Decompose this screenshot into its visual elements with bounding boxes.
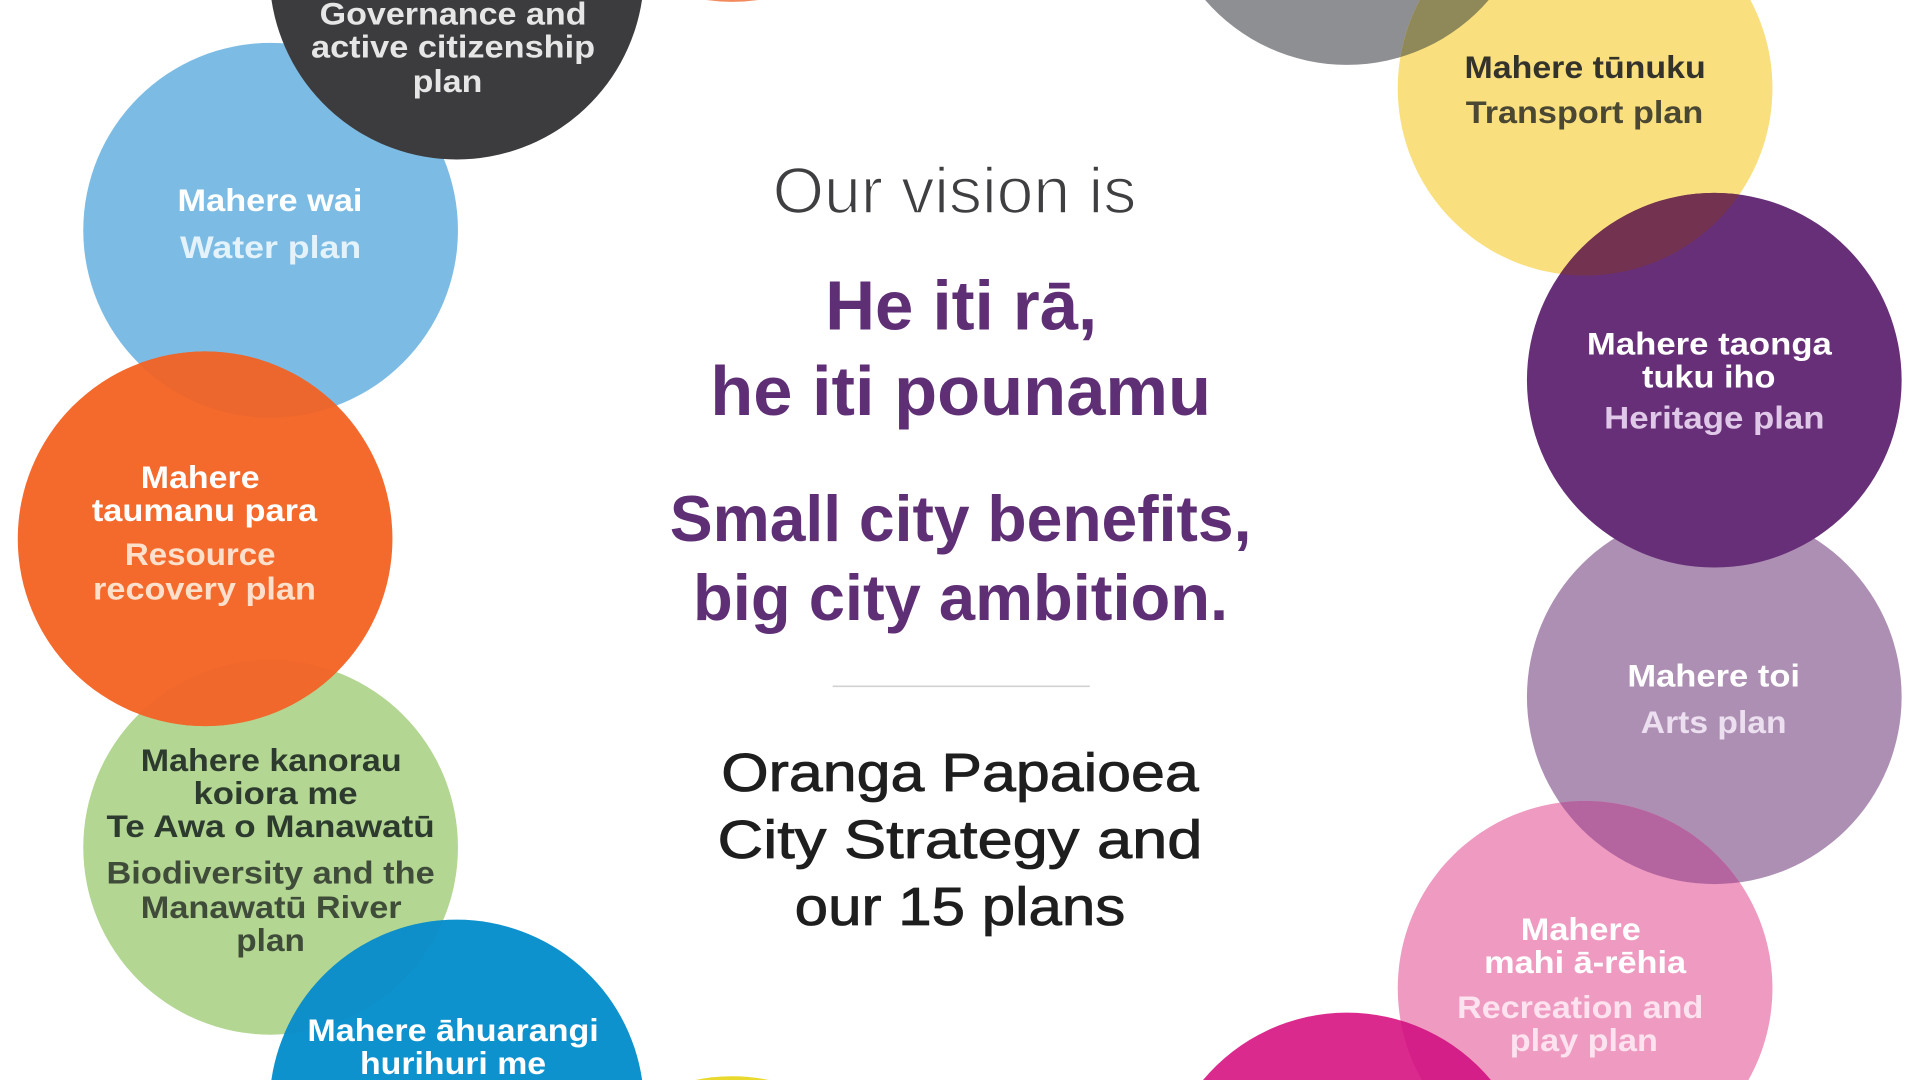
label: governance plan: plan [413, 64, 482, 99]
label: biodiversity plan: Te Awa o Manawatū [107, 809, 435, 844]
text block: Oranga Papaioea City Strategy and our 15 plans: City Strategy and [718, 810, 1202, 870]
circle: recreation and play plan [1398, 801, 1772, 1080]
circle: water plan [83, 43, 458, 418]
label: water plan: Water plan [180, 230, 361, 265]
label: resource recovery plan: recovery plan [93, 571, 316, 606]
label: recreation and play plan [1457, 912, 1703, 1058]
label: climate change plan [307, 1013, 599, 1080]
label: arts plan: Arts plan [1641, 705, 1787, 740]
label: climate change plan: Mahere āhuarangi [307, 1013, 599, 1048]
label: biodiversity plan: Biodiversity and the [107, 855, 435, 890]
heading: small city benefits, big city ambition [670, 482, 1251, 634]
label: recreation and play plan: Mahere [1521, 912, 1641, 947]
label: recreation and play plan: play plan [1510, 1023, 1658, 1058]
heading: small city benefits, big city ambition: big city ambition. [693, 561, 1228, 634]
circle: transport plan [1398, 0, 1772, 276]
circle: magenta plan, cropped at bottom [1203, 1013, 1491, 1080]
label: transport plan: Mahere tūnuku [1464, 50, 1706, 85]
label: heritage plan: Mahere taonga [1587, 326, 1833, 361]
label: transport plan: Transport plan [1466, 95, 1703, 130]
label: recreation and play plan: Recreation and [1457, 990, 1703, 1025]
label: arts plan [1627, 658, 1800, 740]
label: transport plan [1464, 50, 1706, 130]
label: biodiversity plan [107, 743, 435, 958]
heading: He iti rā, he iti pounamu: he iti pounamu [710, 352, 1211, 430]
circle: climate change plan [271, 920, 642, 1080]
circle: governance plan [271, 0, 642, 159]
circle: biodiversity plan [83, 660, 458, 1035]
label: governance plan: active citizenship [311, 30, 595, 65]
label: water plan: Mahere wai [178, 183, 362, 218]
text block: Oranga Papaioea City Strategy and our 15 plans: Oranga Papaioea [721, 743, 1199, 803]
panel: climate change plan [271, 920, 642, 1080]
text block: Oranga Papaioea City Strategy and our 15 plans: our 15 plans [795, 877, 1125, 937]
label: water plan [178, 183, 362, 265]
label: biodiversity plan: Manawatū River [141, 890, 402, 925]
label: resource recovery plan: Resource [125, 537, 276, 572]
label: heritage plan: Heritage plan [1604, 401, 1824, 436]
panel: resource recovery plan [18, 351, 392, 726]
heading: He iti rā, he iti pounamu: He iti rā, [825, 266, 1097, 344]
panel: arts plan [1527, 509, 1902, 884]
circle: arts plan [1527, 509, 1902, 884]
circle: heritage plan [1527, 193, 1902, 568]
panel: heritage plan [1527, 193, 1902, 568]
circle: resource recovery plan [18, 351, 392, 726]
circle: top orange plan, cropped [706, 0, 758, 2]
label: recreation and play plan: mahi ā-rēhia [1484, 945, 1687, 980]
circle: bottom yellow plan, cropped [695, 1076, 769, 1080]
label: climate change plan: hurihuri me [360, 1046, 546, 1080]
panel: governance and active citizenship plan [271, 0, 642, 159]
heading: our vision is: Our vision is [773, 154, 1136, 227]
label: resource recovery plan: taumanu para [92, 493, 318, 528]
panel: water plan [83, 43, 458, 418]
text block: Oranga Papaioea City Strategy and our 15 plans [718, 743, 1202, 937]
label: biodiversity plan: koiora me [193, 776, 358, 811]
label: governance plan [311, 0, 595, 99]
label: biodiversity plan: Mahere kanorau [141, 743, 402, 778]
label: heritage plan [1587, 326, 1833, 436]
label: resource recovery plan [92, 460, 318, 606]
panel: recreation and play plan [1398, 801, 1772, 1080]
label: arts plan: Mahere toi [1627, 658, 1800, 693]
heading: small city benefits, big city ambition: Small city benefits, [670, 482, 1251, 555]
panel: transport plan [1398, 0, 1772, 276]
heading: He iti rā, he iti pounamu [710, 266, 1211, 430]
label: heritage plan: tuku iho [1642, 360, 1776, 395]
panel: biodiversity and the Manawatū River plan [83, 660, 458, 1035]
label: resource recovery plan: Mahere [141, 460, 260, 495]
label: biodiversity plan: plan [236, 923, 305, 958]
circle: grey plan, cropped at top [1205, 0, 1489, 65]
